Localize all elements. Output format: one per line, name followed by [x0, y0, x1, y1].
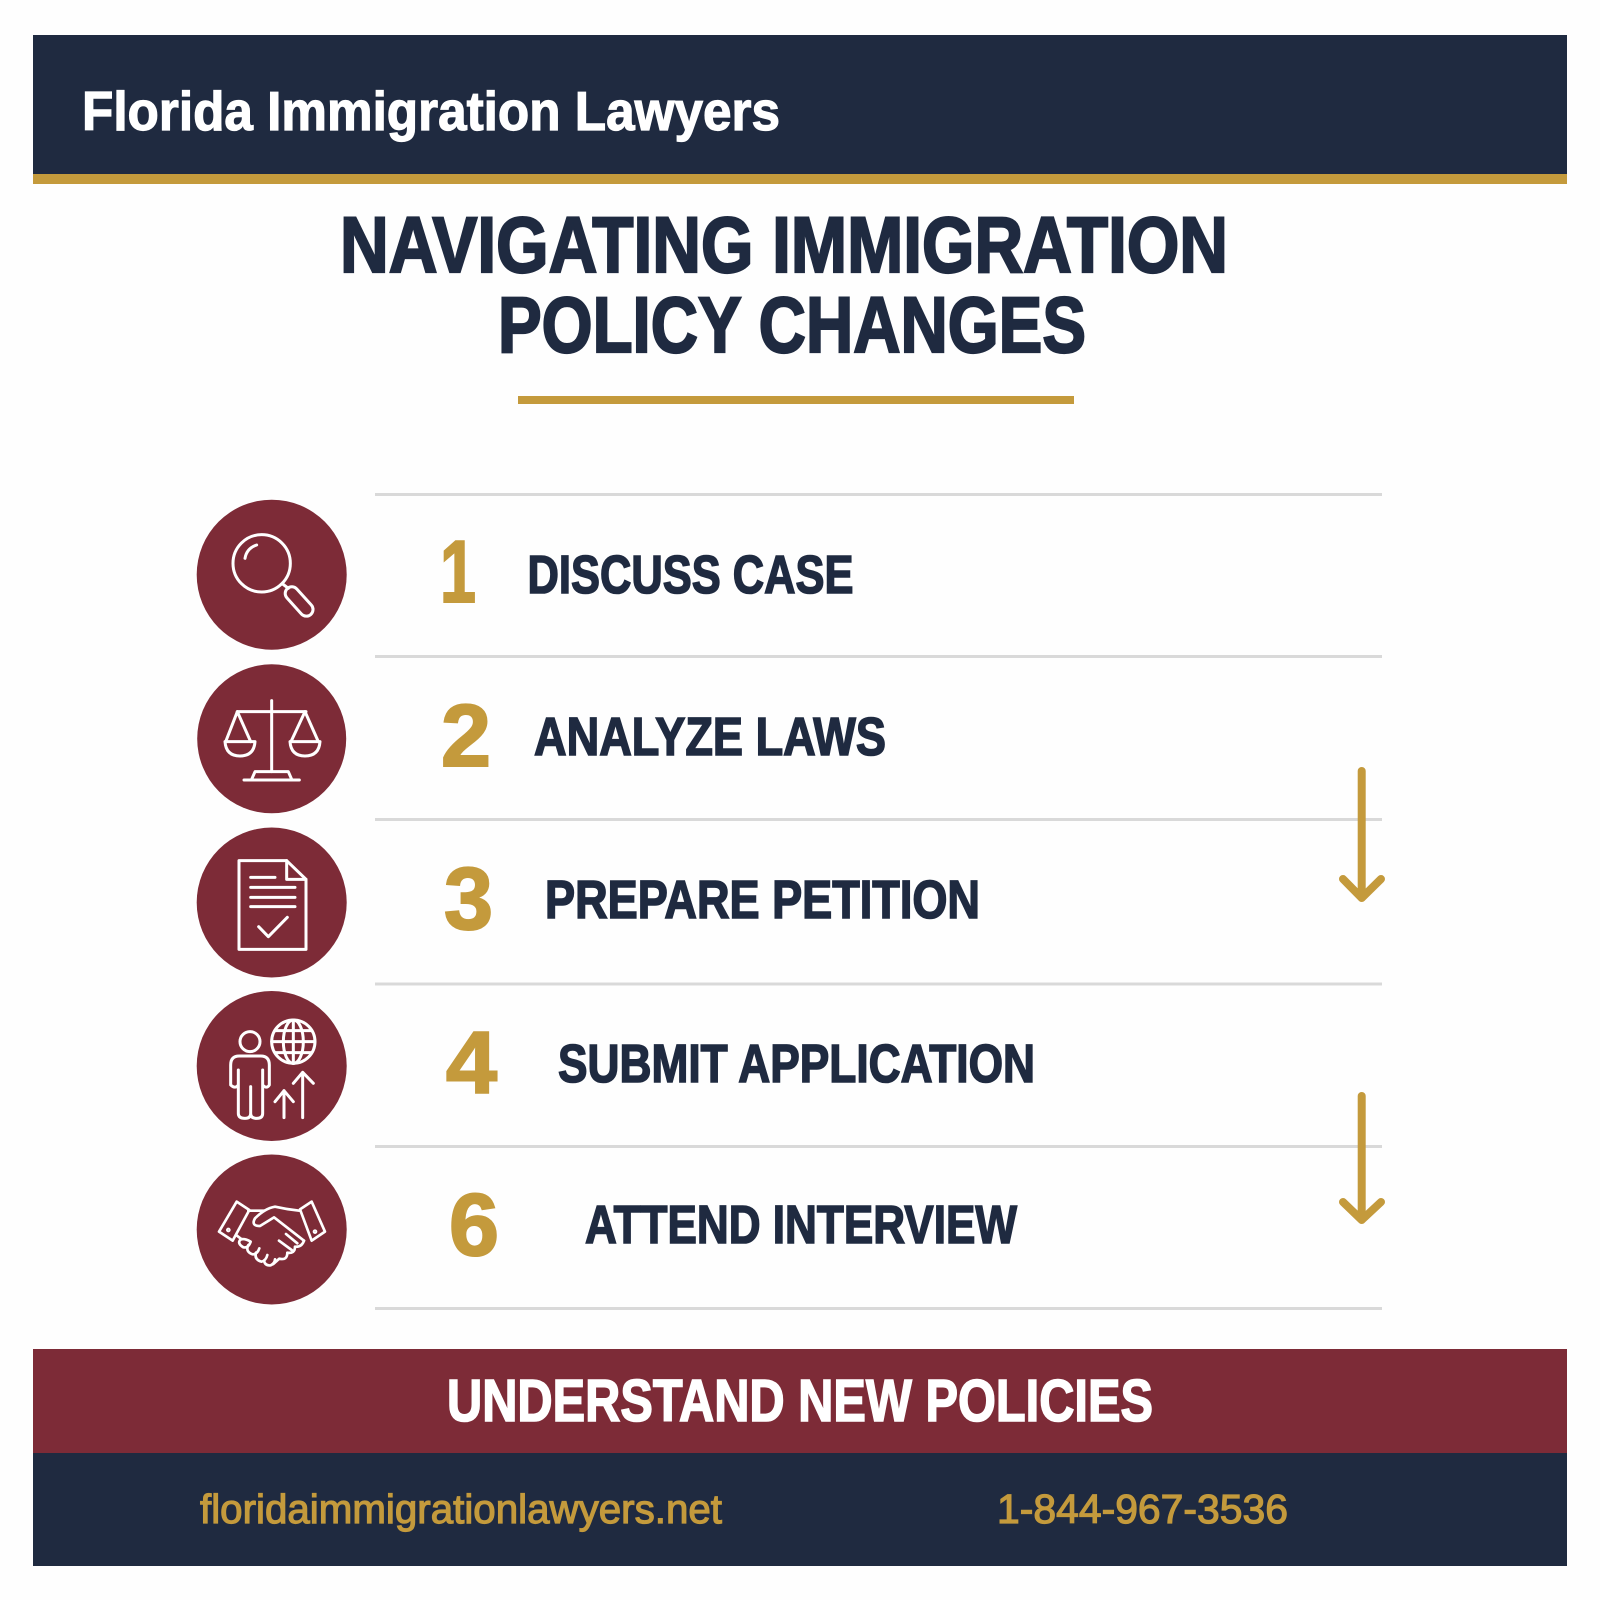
step number 6: 6 [449, 1175, 499, 1274]
icon: scales of justice [197, 664, 346, 813]
call to action text: UNDERSTAND NEW POLICIES [447, 1368, 1153, 1434]
title: NAVIGATING IMMIGRATION [340, 200, 1228, 289]
call to action band [33, 1349, 1567, 1453]
step number 1: 1 [440, 522, 476, 621]
step 4: submit application [197, 991, 1035, 1141]
header banner [33, 35, 1567, 184]
title underline [518, 396, 1074, 404]
icon: magnifying glass [197, 500, 347, 650]
step number 3: 3 [444, 849, 493, 948]
website: floridaimmigrationlawyers.net [200, 1486, 723, 1532]
step number 4: 4 [446, 1013, 497, 1112]
footer contact band [33, 1453, 1567, 1566]
step 3: prepare petition [197, 828, 980, 978]
title [340, 200, 1228, 369]
step label: ATTEND INTERVIEW [585, 1195, 1017, 1255]
step label: ANALYZE LAWS [534, 707, 886, 767]
icon: handshake [197, 1154, 347, 1304]
step label: PREPARE PETITION [545, 870, 980, 930]
step number 2: 2 [441, 686, 491, 785]
arrow: down, lower [1343, 1096, 1381, 1220]
arrow: down, upper [1343, 771, 1381, 898]
step label: SUBMIT APPLICATION [558, 1034, 1035, 1094]
phone number: 1-844-967-3536 [997, 1486, 1288, 1532]
title: POLICY CHANGES [498, 280, 1086, 369]
icon: document with check mark [197, 828, 347, 978]
step 6: attend interview [197, 1154, 1017, 1304]
step 2: analyze laws [197, 664, 886, 813]
step label: DISCUSS CASE [528, 545, 854, 605]
step 1: discuss case [197, 500, 854, 650]
brand name: Florida Immigration Lawyers [82, 80, 780, 142]
icon: person, globe and upward arrows [197, 991, 347, 1141]
